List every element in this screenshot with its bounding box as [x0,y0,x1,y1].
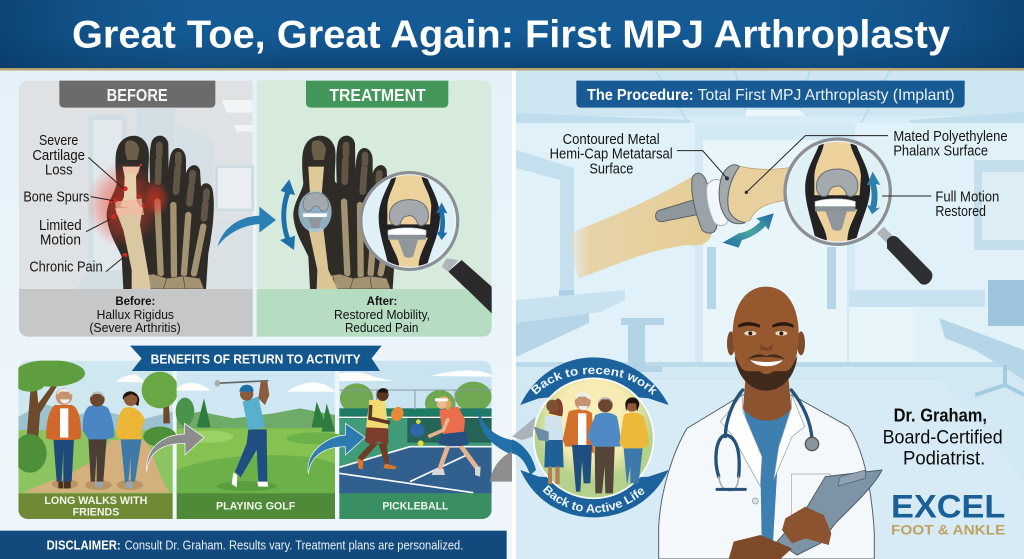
procedure banner: Total First MPJ Arthroplasty (Implant) [698,87,955,104]
scrubs [743,407,791,559]
labels: symptoms: Loss [45,162,73,178]
top ribbon [520,357,669,405]
title banner [0,0,1024,70]
doctor name [883,405,1003,469]
before tab: BEFORE [107,85,168,105]
procedure banner [576,81,965,108]
head [733,287,799,391]
arrow: golf to pickleball [308,423,365,474]
caption: before: Before: [115,294,155,308]
lab coat [659,395,874,559]
base plate [692,173,717,233]
walker three [116,391,145,488]
walker one [46,388,81,488]
labels: implant parts: Full Motion [935,189,999,205]
disclaimer bar: Consult Dr. Graham. Results vary. Treatment plans are personalized. [125,537,463,552]
lapels [720,395,805,487]
stethoscope [716,390,819,491]
motion arrow [723,213,774,248]
ears [727,331,735,355]
procedure banner: The Procedure: [587,87,694,104]
badge: back to active life [512,357,669,518]
walker two [83,391,114,487]
treatment tab [306,81,448,108]
panel: before [19,81,253,337]
labels: symptoms [23,133,125,276]
eyes and brows [738,322,794,328]
caption: before [19,289,253,337]
background: left column [0,70,512,559]
magnifier handle over caption [467,289,492,313]
benefits banner: BENEFITS OF RETURN TO ACTIVITY [151,351,361,366]
doctor name: Board-Certified [883,427,1003,448]
scene: playing golf [176,371,340,519]
panel: benefits of return to activity [0,346,512,559]
arrows: double-headed motion [280,179,295,250]
panel: treatment [257,81,492,337]
labels: implant parts: Surface [589,161,633,177]
badge text: Back to Active Life [542,485,644,513]
labels: symptoms: Cartilage [32,148,85,164]
labels: implant parts [550,129,1008,220]
smile [750,360,783,366]
caption: after: After: [367,294,397,308]
disclaimer bar [0,531,507,559]
player two [410,396,481,477]
labels: implant parts: Phalanx Surface [893,144,988,160]
title: Great Toe, Great Again: First MPJ Arthroplasty [72,14,950,56]
labels: symptoms: Limited [39,218,82,234]
logo: excel foot and ankle [891,489,1005,537]
caption: playing golf [177,493,335,519]
joint implant illustration [565,165,789,278]
caption: after: Reduced Pain [345,320,418,335]
arrow: pickleball to active life [478,407,512,455]
caption: before: Hallux Rigidus [97,307,174,322]
caption: long walks: LONG WALKS WITH [44,495,147,507]
badge people [534,392,649,493]
badge text: Back to recent work [530,368,657,396]
panel: before and treatment comparison [19,81,492,337]
doctor name: Podiatrist. [903,448,985,469]
bottom ribbon [520,470,669,517]
caption: pickleball: PICKLEBALL [382,501,448,513]
beard [735,356,797,391]
background: clinic room right column [512,70,1024,559]
labels: symptoms: Motion [40,232,81,248]
doctor illustration [659,287,882,559]
logo: excel foot and ankle: FOOT & ANKLE [891,521,1005,537]
labels: symptoms: Bone Spurs [23,190,89,206]
before tab [59,81,215,108]
labels: symptoms: Severe [39,133,78,149]
arrow: grey sweep to badge [490,452,512,482]
neck [743,380,791,421]
treatment tab: TREATMENT [329,85,426,105]
metal hemi-cap [719,165,745,224]
arrow: before to treatment [217,207,276,247]
labels: symptoms: Chronic Pain [29,260,103,276]
scene: long walks with friends [13,360,178,519]
golfer [215,380,269,487]
metatarsal bone [565,177,712,278]
logo: excel foot and ankle: EXCEL [891,489,1005,525]
caption: playing golf: PLAYING GOLF [216,501,295,513]
clipboard [777,470,882,555]
foot x-ray with hallux rigidus [86,136,214,289]
panel: doctor and badge [512,286,1005,559]
scene: pickleball [339,361,492,519]
labels: implant parts: Contoured Metal [563,132,660,148]
polyethylene spacer [707,179,729,226]
badge text [530,368,657,513]
magnifier: implant detail [361,171,492,313]
doctor name: Dr. Graham, [894,405,987,426]
benefits banner [130,346,382,371]
foot x-ray with implant [293,136,401,289]
caption: after: Restored Mobility, [334,307,430,322]
hands [782,507,831,545]
labels: implant parts: Restored [935,204,986,220]
caption: long walks [18,493,173,519]
labels: implant parts: Hemi-Cap Metatarsal [550,146,673,162]
caption: before: (Severe Arthritis) [89,320,181,335]
labels: implant parts: Mated Polyethylene [893,129,1008,145]
arrow: walking to golf [147,423,204,472]
player one [357,388,406,469]
caption: after [257,289,492,337]
connector ribbon [512,439,536,475]
disclaimer bar: DISCLAIMER: [47,537,121,552]
coat pocket and button [791,474,830,520]
metal stem [656,198,704,222]
magnifier: close-up of implant [785,139,932,285]
panel: procedure diagram [550,81,1008,285]
caption: pickleball [339,493,492,519]
phalanx bone [727,165,789,222]
caption: long walks: FRIENDS [73,506,120,518]
